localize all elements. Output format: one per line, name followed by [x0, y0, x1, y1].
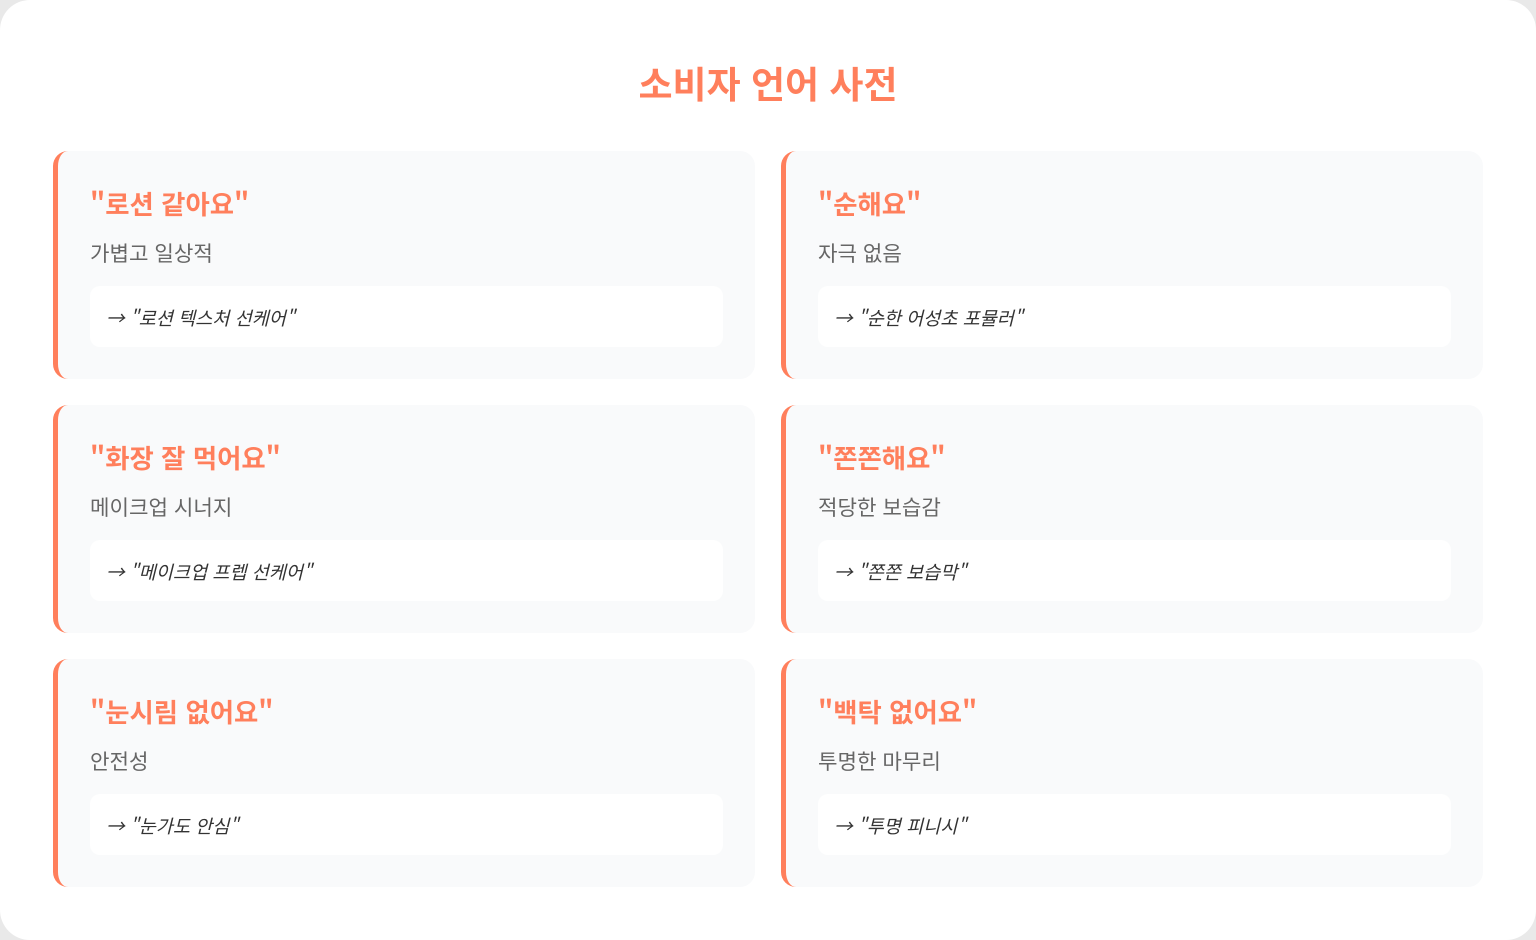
card example — [818, 286, 1451, 347]
card description: 메이크업 시너지 — [90, 491, 232, 522]
card: 로션 같아요 — [53, 151, 755, 379]
card heading: "눈시림 없어요" — [90, 691, 274, 730]
card: 눈시림 없어요 — [53, 659, 755, 887]
card example: → "쫀쫀 보습막" — [834, 558, 966, 585]
card example — [90, 540, 723, 601]
card example — [90, 286, 723, 347]
card heading: "순해요" — [818, 183, 921, 222]
card example: → "메이크업 프렙 선케어" — [106, 558, 312, 585]
card heading: "화장 잘 먹어요" — [90, 437, 281, 476]
card example — [90, 794, 723, 855]
card heading: "쫀쫀해요" — [818, 437, 946, 476]
card example: → "로션 텍스처 선케어" — [106, 304, 295, 331]
card example: → "투명 피니시" — [834, 812, 966, 839]
card description: 적당한 보습감 — [818, 491, 941, 522]
card heading: "로션 같아요" — [90, 183, 249, 222]
card example: → "순한 어성초 포뮬러" — [834, 304, 1023, 331]
title: 소비자 언어 사전 — [638, 55, 898, 109]
card description: 가볍고 일상적 — [90, 237, 213, 268]
card: 백탁 없어요 — [781, 659, 1483, 887]
card example — [818, 794, 1451, 855]
card description: 투명한 마무리 — [818, 745, 941, 776]
card heading: "백탁 없어요" — [818, 691, 977, 730]
card: 쫀쫀해요 — [781, 405, 1483, 633]
card example: → "눈가도 안심" — [106, 812, 238, 839]
card example — [818, 540, 1451, 601]
card: 순해요 — [781, 151, 1483, 379]
card description: 안전성 — [90, 745, 148, 776]
card: 화장 잘 먹어요 — [53, 405, 755, 633]
card description: 자극 없음 — [818, 237, 902, 268]
